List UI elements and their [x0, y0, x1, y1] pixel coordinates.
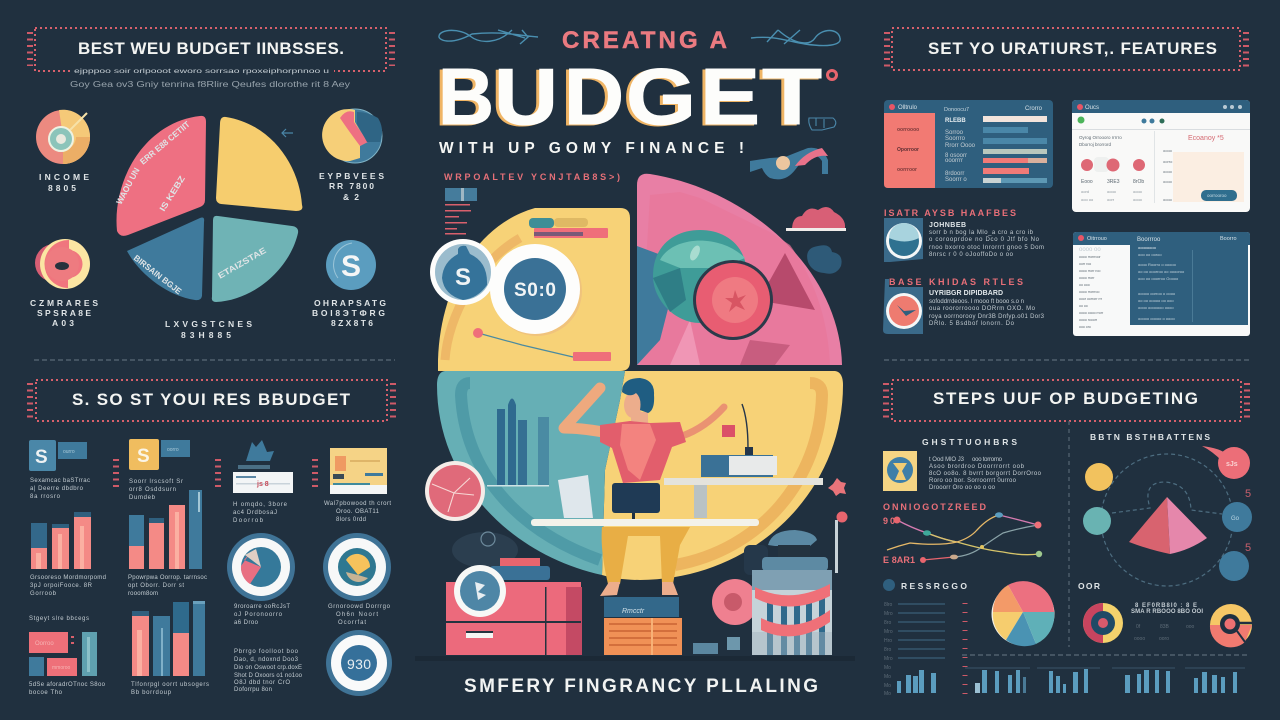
- dashboard card C: oooo oooo rrorr: [1079, 311, 1104, 315]
- dashboard card A: Donoocu7: [944, 107, 969, 113]
- donuts row: 83B: [1160, 624, 1170, 630]
- orbit diagram: 5: [1245, 488, 1251, 500]
- feature block 1: [884, 208, 1044, 262]
- paragraph: Pbrrgo foolloot boo: [234, 649, 299, 655]
- icon tile: blue: S: [35, 447, 48, 468]
- pie chart: ETAIZSTAE: [216, 245, 268, 281]
- feature block 2: DRlo. 5 Bsdbof lonorn. Do: [929, 321, 1015, 327]
- illustration: pedestal: Rmcctr: [622, 608, 645, 615]
- dashboard card B: oooo: [1163, 148, 1173, 153]
- text: ring captions: a6 Droo: [234, 620, 259, 626]
- icon tile: yellow: oorro: [167, 447, 179, 453]
- paragraph: Shot D Oxoors o1 no1oo: [234, 673, 303, 679]
- line chart: E 8AR1: [883, 555, 915, 565]
- investments label: [165, 319, 252, 340]
- income label: 8805: [48, 183, 76, 193]
- right arm: [682, 407, 724, 436]
- step text: GHSTTUOHBRS: [922, 437, 1017, 447]
- step text: Roro oo bor. Sorroorrrt 0urroo: [929, 478, 1017, 484]
- line chart: [883, 502, 1042, 565]
- donuts row: 8 EF0RB8I0 : 8 E: [1135, 603, 1197, 609]
- red knob: [693, 260, 773, 340]
- dashboard card B: Eooo: [1081, 179, 1093, 185]
- savings label: [30, 298, 98, 328]
- legend and sparklines: 8ro: [884, 647, 891, 653]
- text: chart card: Doorrob: [233, 518, 264, 524]
- dashboard card C: ooo oo ooroo: [1138, 252, 1162, 257]
- dashboard card C: oooo Roorro o ooooo: [1138, 262, 1177, 267]
- text: blue tile: 8a rrosro: [30, 494, 61, 500]
- dashboard card A: ooorrrr: [945, 158, 963, 164]
- icon: expenses: [322, 109, 382, 163]
- intro text: ejpppoo soir orlpooot eworo sorrsao rpoxeiphorpnnoo u: [74, 69, 329, 75]
- expenses label: &2: [343, 192, 359, 202]
- donuts row: [1078, 581, 1253, 647]
- red medallion: [425, 461, 485, 521]
- legend and sparklines: [883, 579, 967, 697]
- illustration: cabinet: [446, 532, 582, 655]
- lower desk: [531, 519, 759, 526]
- icon tile: yellow: [129, 439, 190, 470]
- text: ring captions: Oh6n Noort: [336, 612, 378, 618]
- text: lower captions: Tlfonrpgl oorrt ubsogers: [131, 682, 209, 688]
- icon: income: [36, 110, 90, 164]
- slice: pink: [637, 174, 842, 365]
- score ring: 930: [347, 656, 371, 672]
- dashboard card B: oooo: [1133, 197, 1143, 202]
- title word BUDGET: D: [561, 53, 621, 142]
- title word BUDGET: E: [697, 53, 757, 142]
- title line 1: CREATNG A: [562, 27, 727, 54]
- dashboard card C: ooooo oorroo o oooo: [1138, 291, 1176, 296]
- dashboard card A: Olltrulo: [898, 105, 918, 111]
- icon tile: blue: ourro: [63, 449, 75, 455]
- text: yellow sheet: Oroo. OBAT11: [336, 509, 380, 515]
- step text: Drooorr Oro oo oo o oo: [929, 485, 996, 491]
- dashboard card C: ooooo ooooo o oooo: [1138, 316, 1175, 321]
- step text: t Ood MlO J3: [929, 457, 965, 463]
- feature block 1: 8nrsc r 0 0 oJooffoDo o oo: [929, 252, 1014, 258]
- heading frame: [886, 380, 1247, 421]
- title word BUDGET: G: [626, 52, 696, 141]
- pie chart: ERR E88 CETIIT: [138, 119, 192, 167]
- text: bar captions: opt Oborr. Dorr st: [128, 583, 184, 589]
- dashboard card C: oo oo: [1079, 304, 1088, 308]
- dollar label: [312, 298, 386, 328]
- legend and sparklines: Mo: [884, 665, 891, 671]
- pie small: [992, 581, 1054, 646]
- text: ring captions: Ocorrfat: [338, 620, 366, 626]
- dashboard card B: oooo: [1163, 197, 1173, 202]
- score ring: [326, 630, 392, 696]
- text: yellow sheet: [324, 501, 391, 523]
- skyline bars: [487, 398, 549, 486]
- heading frame: [30, 28, 392, 71]
- neck and head: [622, 378, 654, 425]
- expenses label: EYPBVEES: [319, 171, 384, 181]
- expenses label: RR 7800: [329, 181, 374, 191]
- line chart: ONNIOGOTZREED: [883, 502, 986, 512]
- bar chart 1: [31, 512, 91, 569]
- dashboard card C: Oitrrouo: [1087, 236, 1107, 242]
- heading frame: SET YO URATIURST,. FEATURES: [928, 39, 1217, 58]
- text: lower captions: bocoe Tho: [29, 690, 63, 696]
- paragraph: Dio on Oswoot crp.doxE: [234, 665, 302, 671]
- text: yellow tile: [129, 479, 183, 501]
- panel: best budget: [30, 28, 392, 340]
- subtitle: WITH UP GOMY FINANCE !: [439, 140, 744, 157]
- icon: dollar: S: [341, 250, 361, 283]
- dashboard card C: oooo rrorrroor: [1079, 255, 1101, 259]
- title word BUDGET: T: [762, 52, 822, 141]
- donuts row: ooo: [1186, 624, 1195, 630]
- panel: central title: [435, 27, 846, 496]
- dashboard card C: Boorrroo: [1137, 237, 1161, 243]
- icon tile: yellow: S: [137, 446, 150, 467]
- shirt: [600, 421, 686, 483]
- coin display: [490, 244, 582, 336]
- pie chart: BIRSAIN BGJE: [132, 253, 184, 296]
- panel: set your budget: [29, 380, 393, 696]
- dashboard card A: Oporroor: [897, 147, 919, 153]
- upper desk: [664, 478, 823, 518]
- donuts row: 0f: [1136, 624, 1141, 630]
- pie chart: [114, 116, 302, 302]
- pyramid: [1129, 497, 1207, 554]
- title word BUDGET: B: [435, 53, 491, 142]
- step text: ooo torrorno: [972, 457, 1003, 463]
- step text: [883, 437, 1042, 491]
- pie chart: WAOU UN: [114, 166, 142, 206]
- dashboard card B: oooo: [1163, 169, 1173, 174]
- illustration: pedestal: [604, 597, 682, 655]
- dashboard card A: Crorro: [1025, 106, 1043, 112]
- small tag: [809, 118, 836, 130]
- bar chart 3: [29, 632, 97, 676]
- title word BUDGET: D: [564, 52, 624, 141]
- feature block 2: oua roororroooo DORrm OXO. Mo: [929, 306, 1036, 312]
- money bag badge: S: [455, 264, 471, 291]
- paper: [558, 475, 593, 518]
- legend and sparklines: Mo: [884, 683, 891, 689]
- laptop: [612, 483, 660, 519]
- image card: yellow sheet: [330, 448, 387, 494]
- savings label: CZMRARES: [30, 298, 98, 308]
- dashboard card A: Soorrr o: [945, 177, 967, 183]
- mini bar charts: [897, 655, 1250, 693]
- feature block 1: sorr b n bog la Mlo_a cro a cro ib: [929, 230, 1034, 236]
- line chart: 9 0: [883, 516, 895, 526]
- orbit diagram: Go: [1231, 516, 1240, 522]
- bowl: yellow half: [602, 371, 843, 580]
- savings label: A03: [52, 318, 74, 328]
- dashboard card A: RLEBB: [945, 118, 966, 124]
- books and lamp: [701, 404, 777, 477]
- dashboard card C: ooo oro: [1079, 325, 1091, 329]
- paragraph: [234, 649, 303, 693]
- text: chart card: H omqdo, 3bore: [233, 502, 288, 508]
- donuts row: OOR: [1078, 581, 1100, 591]
- dashboard card B: ooo oo: [1081, 197, 1094, 202]
- feature block 1: o corooprdoe no Dco 0 Jtf bfo No: [929, 237, 1040, 243]
- pink cloud: [786, 207, 846, 231]
- step text: 8cO oo8o. 8 bvrrt borgorrt DorrOroo: [929, 471, 1042, 477]
- heading frame: BEST WEU BUDGET IINBSSES.: [78, 39, 344, 58]
- icon tile: blue: [29, 440, 87, 471]
- heading frame: [30, 380, 393, 421]
- dashboard card A: [884, 100, 1053, 188]
- feature block 1: rnoo bxorro otoc Inrorrrt gnoo 5 Dom: [929, 245, 1044, 251]
- text: bar captions: Gorroob: [30, 591, 57, 597]
- dashboard card C: [1073, 232, 1250, 336]
- feature block 2: roya oorrnorooy Dnr3B Dnfyp.o01 Dor3: [929, 314, 1045, 320]
- text: blue tile: Sexamcac baSTrrac: [30, 478, 90, 484]
- feature block 2: BASE KHIDAS RTLES: [889, 277, 1023, 287]
- pie ring 2: [323, 533, 391, 601]
- panel: features: [883, 28, 1250, 336]
- dashboard card A: Rrorr Oooo: [945, 143, 976, 149]
- bar chart 4: [132, 601, 205, 676]
- dashboard card C: Boorro: [1220, 236, 1237, 242]
- teal sphere: [653, 230, 747, 323]
- text: bar captions: 3pJ orpoiFooce. 8R: [30, 583, 93, 589]
- feature block 1: ISATR AYSB HAAFBES: [884, 208, 1016, 218]
- text: lower captions: 5dSe aforadrOTnoc S8oo: [29, 682, 106, 688]
- dashboard card C: oo oo ooorroo oo ooooroo: [1138, 269, 1185, 274]
- text: yellow tile: Dumdeb: [129, 495, 156, 501]
- bar chart 3: Oorroo: [35, 641, 54, 647]
- slice: yellow: [438, 208, 630, 371]
- investments label: LXVGSTCNES: [165, 319, 252, 329]
- legend and sparklines: Mo: [884, 691, 891, 697]
- income label: INCOME: [39, 172, 89, 182]
- legend and sparklines: 8lro: [884, 602, 893, 608]
- pants: [602, 527, 690, 584]
- heading: stacked: Stgeyt slre bbcegs: [29, 616, 89, 622]
- chart: main pie top: [430, 174, 842, 371]
- dashboard card A: Sorroo: [945, 130, 964, 136]
- dashboard card B: [1072, 100, 1250, 212]
- dashboard card A: 8 osoorr: [945, 153, 967, 159]
- dashboard card B: 8rOb: [1133, 179, 1144, 185]
- text: bar captions: rooom8om: [128, 591, 158, 597]
- text: ring captions: oJ Poronoorro: [234, 612, 283, 618]
- intro text: Goy Gea ov3 Gniy tenrina f8Rlire Qeufes dlorothe rit 8 Aey: [70, 80, 350, 89]
- donuts row: SMA R RBOOO 8BO OOI: [1131, 609, 1203, 615]
- dashboard card C: oooo rrorrroo: [1079, 290, 1099, 294]
- text: chart card: ac4 DrdbosaJ: [233, 510, 277, 516]
- dashboard card C: oo ooo: [1079, 283, 1090, 287]
- feet: [600, 582, 678, 596]
- text: ring captions: Grnoroowd Dorrrgo: [328, 604, 391, 610]
- feature block 2: UYRIBGR DIPIDBARD: [929, 290, 1003, 297]
- chart: main bowl: [425, 371, 843, 596]
- text: yellow tile: orr8 Osddsurn: [129, 487, 176, 493]
- dashboard card C: oooo rrorr: [1079, 276, 1095, 280]
- income label: [39, 172, 89, 193]
- left arm: [564, 388, 603, 432]
- orbit diagram: BBTN BSTHBATTENS: [1090, 432, 1210, 442]
- heading frame: S. SO ST YOUI RES BBUDGET: [72, 390, 351, 409]
- text: yellow tile: Soorr lrscsoft Sr: [129, 479, 183, 485]
- text: bar captions: [30, 575, 207, 597]
- dashboard card B: Oucs: [1085, 105, 1099, 111]
- dashboard card B: Ecoanoy *5: [1188, 135, 1224, 142]
- paragraph: O8J dbd tnor CrO: [234, 680, 290, 686]
- dashboard card B: oooo: [1133, 189, 1143, 194]
- dashboard card A: Soorrro: [945, 136, 966, 142]
- step text: Asoo brordroo Doorrrorrt oob: [929, 464, 1025, 470]
- ground strip: [415, 656, 855, 661]
- small coral heading: WRPOALTEV YCNJTAB8S>): [444, 172, 620, 182]
- person: [564, 378, 735, 596]
- feature block 1: JOHNBEB: [929, 222, 966, 229]
- dollar label: OHRAPSATG: [314, 298, 386, 308]
- intro text: [70, 66, 350, 89]
- text: bar captions: Grsooreso Mordmorpomd: [30, 575, 106, 581]
- dashboard card C: oorr roo: [1079, 262, 1091, 266]
- heading frame: [887, 28, 1246, 70]
- icon: savings: [35, 239, 90, 289]
- text: ring captions: [234, 604, 391, 626]
- text: yellow sheet: Wal7pbowood th crort: [324, 501, 391, 507]
- dashboard card A: oorroooo: [897, 127, 919, 133]
- expenses label: [319, 171, 384, 202]
- donuts row: oooo: [1134, 636, 1145, 642]
- paragraph: Doforrpu 8on: [234, 687, 272, 693]
- illustration: trash can: [693, 512, 848, 655]
- investments label: 83H885: [181, 330, 231, 340]
- mini list: [445, 188, 477, 234]
- panel: steps of budgeting: [883, 380, 1253, 697]
- title word BUDGET: [435, 52, 822, 142]
- dashboard card C: ooor oorrorr rrr: [1079, 297, 1103, 301]
- dollar label: 8ZX8T6: [331, 318, 373, 328]
- title word BUDGET: T: [759, 53, 819, 142]
- dollar label: BOI8ЭTФRG: [312, 308, 385, 318]
- legend and sparklines: Mro: [884, 611, 893, 617]
- icon: dollar: [326, 240, 376, 290]
- dashboard card A: 8rdoorr: [945, 171, 964, 177]
- heading frame: STEPS UUF OP BUDGETING: [933, 389, 1198, 408]
- dashboard card B: oorrooroo: [1207, 193, 1227, 198]
- dashboard card B: oorr: [1107, 197, 1115, 202]
- dashboard card A: oorrroor: [897, 167, 917, 173]
- legend and sparklines: Mro: [884, 656, 893, 662]
- legend and sparklines: Mo: [884, 674, 891, 680]
- text: blue tile: a| Deerre dbdbro: [30, 486, 84, 492]
- gauge circle: [454, 565, 506, 617]
- title word BUDGET: G: [623, 53, 693, 142]
- small flower: [828, 478, 846, 496]
- legend and sparklines: Mro: [884, 629, 893, 635]
- text: yellow sheet: 8lors 0rdd: [336, 517, 366, 523]
- text: ring captions: 9roroarre ooRcJsT: [234, 604, 290, 610]
- bar chart 2: [129, 490, 202, 569]
- orbit diagram: 5: [1245, 542, 1251, 554]
- dashboard card B: oooo: [1163, 179, 1173, 184]
- bowl inner rings: [461, 383, 822, 565]
- footer caption: SMFERY FINGRANCY PLLALING: [464, 676, 818, 697]
- text: bar captions: Ppowrpwa Oorrop. tarrnsoc: [128, 575, 207, 581]
- image card: chart: [233, 440, 293, 493]
- ornament left: [439, 30, 538, 44]
- dashboard card B: 3RE3: [1107, 179, 1120, 185]
- title word BUDGET: U: [494, 52, 558, 141]
- dashboard card C: oooo rrorr roo: [1079, 269, 1100, 273]
- text: chart card: [233, 502, 288, 524]
- feature block 2: [883, 277, 1045, 334]
- pie ring 1: [227, 533, 295, 601]
- ornament right: [751, 30, 840, 46]
- image card: chart: js 8: [256, 481, 269, 488]
- title word BUDGET: B: [438, 52, 494, 141]
- title word BUDGET: U: [491, 53, 555, 142]
- coin display: S0:0: [514, 280, 556, 301]
- dashboard card B: Oyrog Orroooro rrrrro: [1079, 135, 1122, 140]
- feature block 2: sofoddrrdeoos. I mooo ft booo s.o n: [929, 299, 1024, 305]
- dashboard card B: Dborroj brorrord: [1079, 142, 1112, 147]
- dashboard card C: oooo ooooooo oooo: [1138, 305, 1174, 310]
- legend and sparklines: RESSRGGO: [901, 581, 967, 591]
- bowl: teal half: [437, 371, 625, 575]
- bar chart 3: mmoroo: [52, 665, 71, 671]
- dashboard card C: oo oo ooooo oo ooo: [1138, 298, 1174, 303]
- blue cloud: [807, 245, 842, 274]
- dashboard card C: ooo oo ooorroo Ooooo: [1138, 276, 1179, 281]
- text: lower captions: [29, 682, 209, 696]
- legend and sparklines: Hro: [884, 638, 892, 644]
- orbit diagram: sJs: [1226, 461, 1238, 468]
- legend and sparklines: 8ro: [884, 620, 891, 626]
- text: lower captions: Bb borrdoup: [131, 690, 172, 696]
- text: blue tile: [30, 478, 90, 500]
- dashboard card B: oord: [1081, 189, 1089, 194]
- hand bottle: [722, 425, 735, 437]
- paragraph: Dao, d, ndoxnd Doo3: [234, 657, 299, 663]
- dashboard card C: oooo oo: [1079, 247, 1101, 253]
- orbit diagram: [1083, 432, 1252, 586]
- savings label: SPSRA8E: [37, 308, 91, 318]
- title word BUDGET: E: [700, 52, 760, 141]
- gadget illustration: [750, 148, 828, 179]
- money bag badge: [430, 239, 496, 305]
- dashboard card C: oooo rooorr: [1079, 318, 1098, 322]
- dashboard card B: oooo: [1107, 189, 1117, 194]
- donuts row: ooro: [1159, 636, 1169, 642]
- dashboard card C: oooooooo: [1138, 245, 1157, 250]
- pie chart: IS KEBZ: [157, 174, 187, 213]
- dashboard card B: oorro: [1163, 159, 1173, 164]
- registered mark: [826, 69, 838, 81]
